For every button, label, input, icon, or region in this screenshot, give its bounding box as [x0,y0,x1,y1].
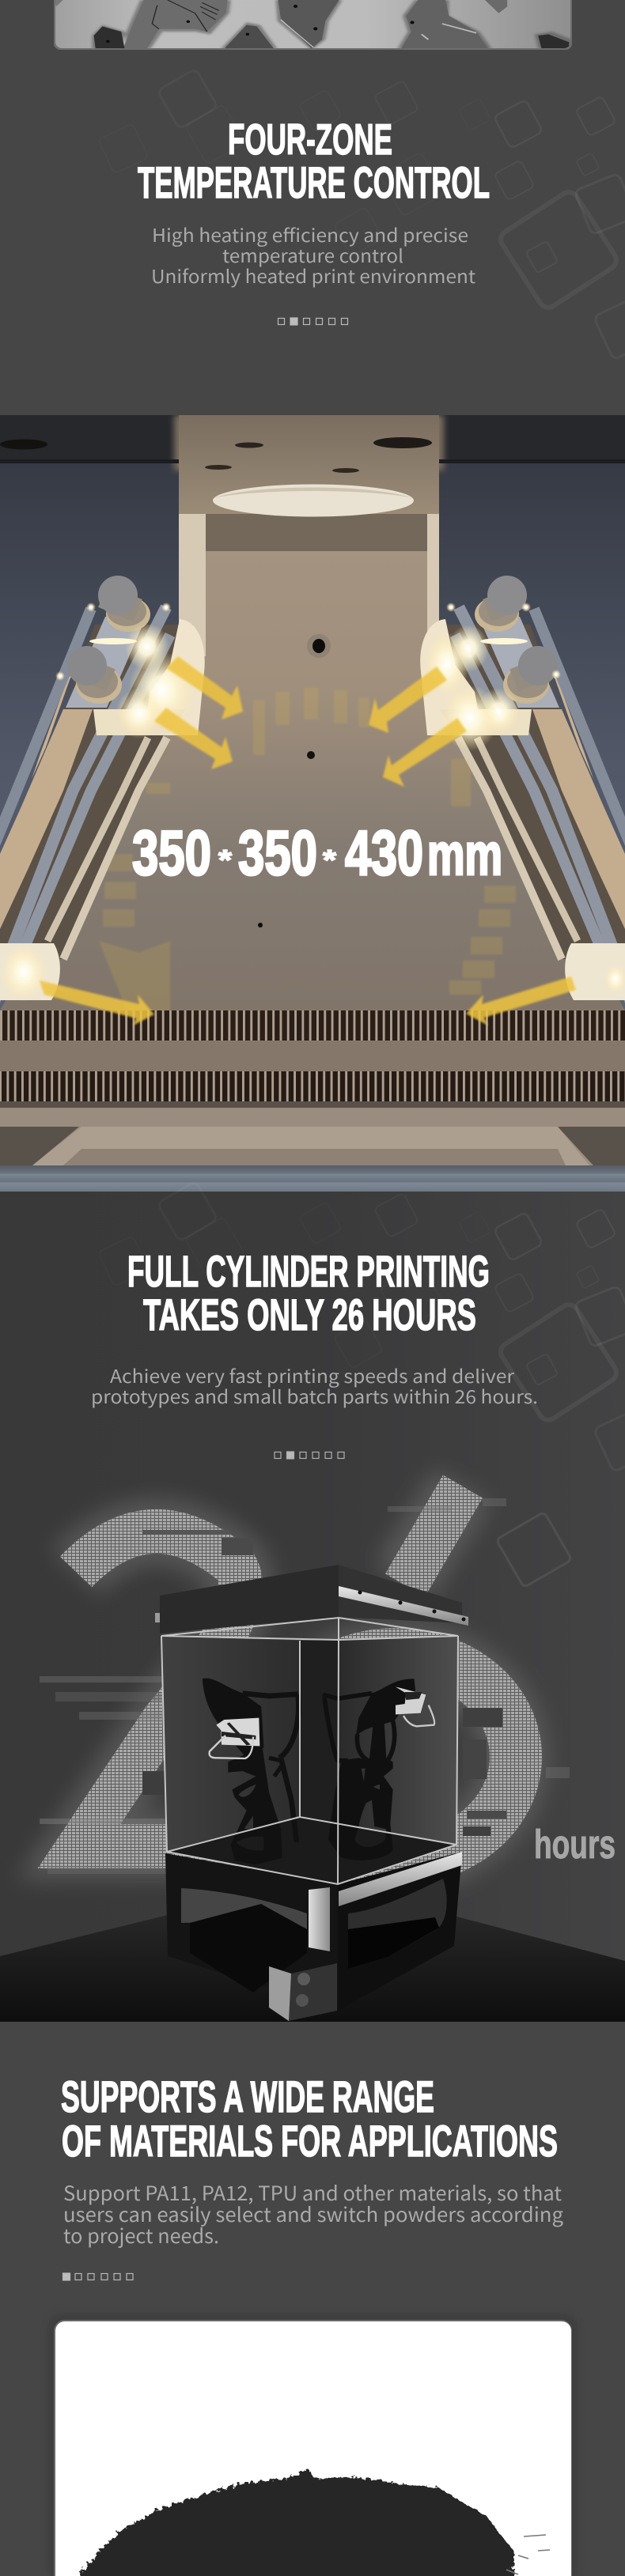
top lid [155,1565,468,1634]
chamber ceiling and centre column [0,415,625,1010]
heading: FOUR-ZONE [228,115,392,164]
build volume label: 430 [345,818,423,888]
description text: users can easily select and switch powders according [63,2200,563,2228]
photo card: printed parts [54,0,573,50]
heater light glows [0,602,625,1001]
pagination squares [278,318,348,325]
card shadow [47,2313,578,2576]
big glitch numeral 26 [40,1486,570,1874]
arrow: upper right [369,667,447,733]
build volume label: 350 [238,818,317,888]
panel: supports a wide range of materials [54,2080,572,2576]
description text: Uniformly heated print environment [151,262,475,289]
build volume label: mm [427,822,502,887]
description text [151,221,475,289]
right heater assembly [420,576,625,1020]
arrow: lower left [40,980,154,1025]
arrow: mid right [383,718,467,787]
description text: Support PA11, PA12, TPU and other materials, so that [63,2178,562,2207]
heading [127,1246,490,1339]
arrow: lower right [466,976,576,1025]
lower vents [0,1010,625,1192]
build volume label: * [323,844,336,876]
panel: build chamber photo [0,415,625,1192]
build volume label [132,829,501,876]
photo card: material powder [54,2320,572,2576]
description text: temperature control [222,241,403,268]
glitch streaks [40,1498,570,1874]
silver rail and brackets [269,1852,462,2021]
background rounded-square pattern [98,1181,625,1472]
floor [0,1915,625,2022]
description text: High heating efficiency and precise [152,221,468,247]
description text [63,2178,563,2249]
build volume label: * [218,844,232,876]
background square [496,1512,572,1588]
heading [138,115,490,207]
glass chamber [161,1636,458,1884]
build volume label: 350 [132,818,211,888]
printer base [165,1852,462,2011]
right clamp [396,1686,426,1714]
panel: four-zone temperature control [54,0,625,359]
side walls [0,415,625,1016]
left clamp [216,1718,259,1746]
pagination squares [63,2273,133,2280]
printer module illustration [155,1565,468,2021]
background rounded-square pattern [98,69,625,360]
powder pile [71,2469,514,2576]
pagination squares [275,1452,344,1459]
right part [323,1679,415,1860]
left part [203,1679,298,1864]
chamber outline [161,1618,458,1884]
arrow: upper left [166,656,243,720]
heading [61,2072,558,2166]
panel: full cylinder printing [0,1181,625,2022]
heat flow arrows [40,656,576,1025]
description text: prototypes and small batch parts within 26 hours. [91,1382,538,1409]
arrow: mid left [154,708,233,769]
description text: Achieve very fast printing speeds and deliver [110,1362,514,1388]
printed parts [203,1679,434,1864]
faint heat ring [100,689,516,1010]
left heater assembly [0,576,205,1020]
description text [91,1362,538,1409]
description text: to project needs. [63,2221,219,2249]
